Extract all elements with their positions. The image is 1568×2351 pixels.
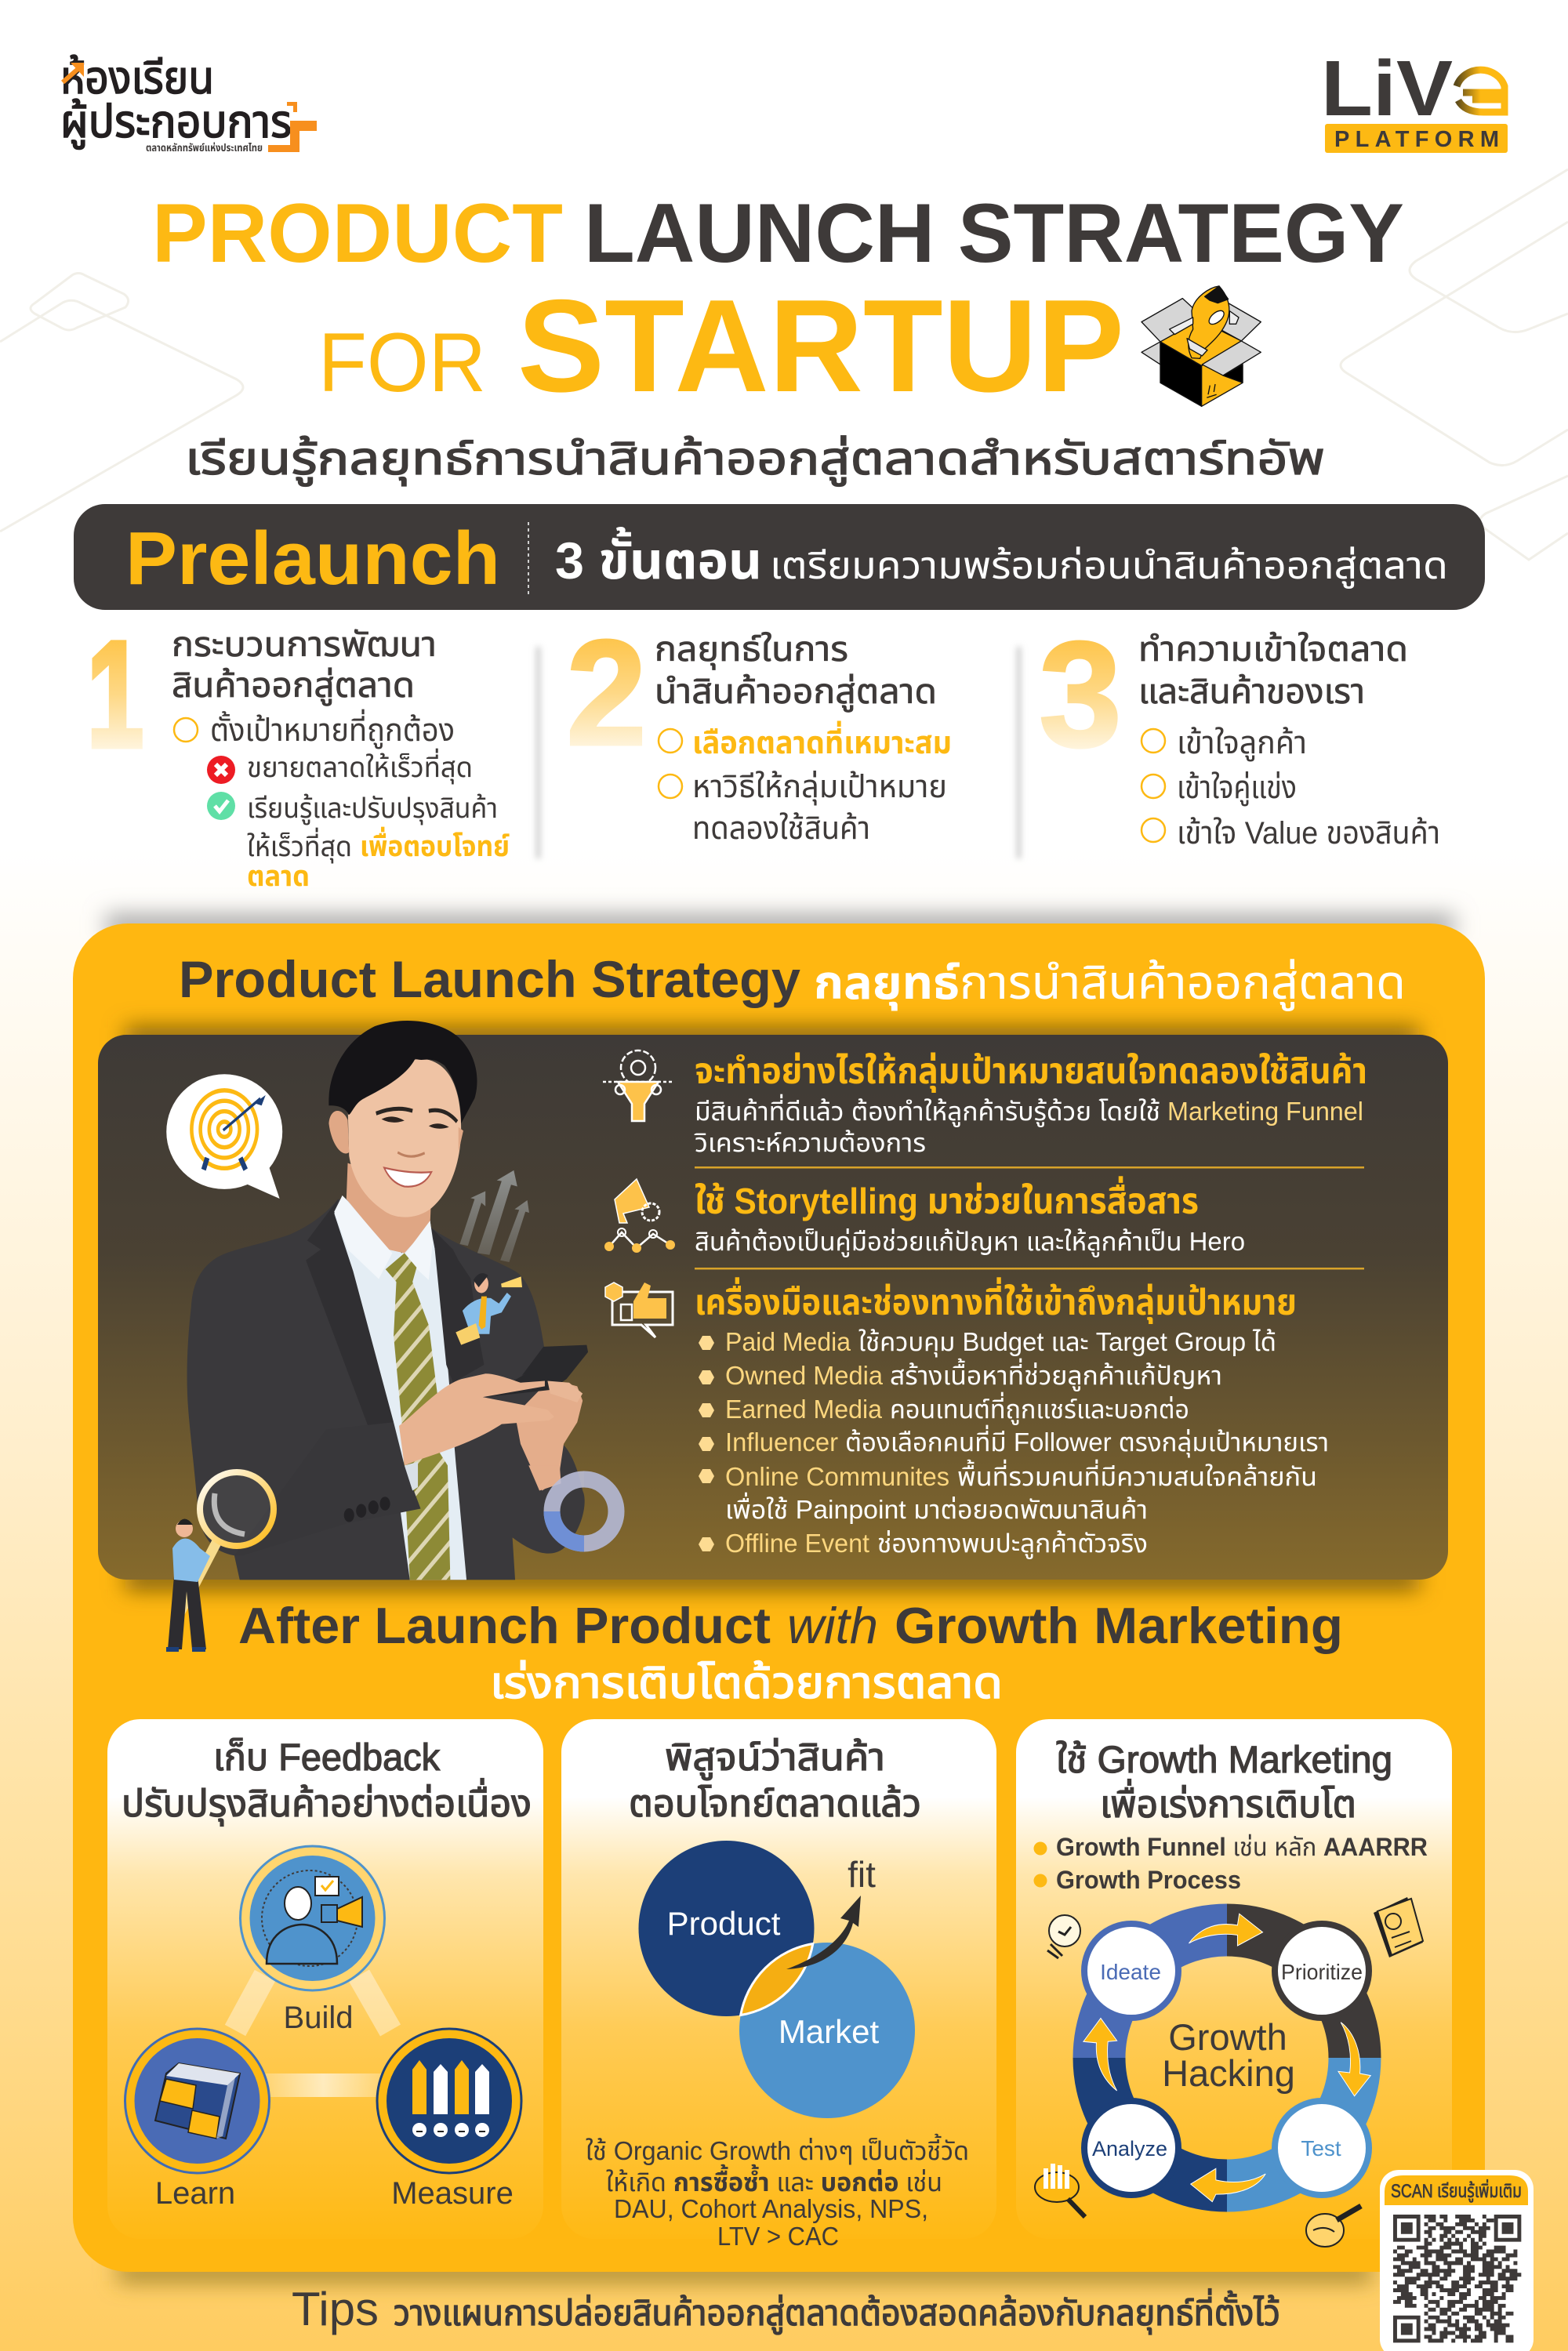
lower panel shadow (118, 2262, 1372, 2282)
phone (485, 1345, 588, 1397)
bullet list: channels: Owned Media (725, 1361, 884, 1390)
icon: measure (377, 2029, 521, 2173)
jacket (187, 1199, 585, 1580)
logo: classroom for entrepreneurs (60, 53, 317, 154)
eyes (382, 1116, 449, 1129)
title: Product Launch Strategy: PRODUCT (152, 186, 563, 280)
tips line: วางแผนการปล่อยสินค้าออกสู่ตลาดต้องสอดคล้องกับกลยุทธ์ที่ตั้งไว้ (394, 2288, 1280, 2335)
icon: documents (1374, 1897, 1423, 1957)
heading: after launch product: with (787, 1597, 878, 1654)
logo: Live Platform (1321, 45, 1508, 153)
title: For Startup: FOR (318, 315, 486, 409)
nose (397, 1152, 425, 1156)
sleeve buttons (344, 1497, 390, 1522)
bullet list: channels (699, 1327, 1329, 1559)
bullet list: channels: Online Communites (725, 1462, 949, 1491)
growth hacking cycle: Hacking (1162, 2052, 1295, 2094)
card title: ปรับปรุงสินค้าอย่างต่อเนื่อง (122, 1778, 532, 1827)
bullet list: channels: คอนเทนต์ที่ถูกแชร์และบอกต่อ (890, 1391, 1189, 1425)
banner: prelaunch: เตรียมความพร้อมก่อนนำสินค้าออกสู่ตลาด (770, 546, 1448, 589)
left hand (399, 1373, 554, 1465)
heading: product launch strategy (179, 950, 1406, 1011)
growth hacking cycle: Test (1301, 2136, 1341, 2161)
panel: step 1: ให้เร็วที่สุด (247, 827, 352, 863)
panel: step 2: 2 (566, 608, 647, 777)
icon: pen and speech (1306, 2206, 1361, 2247)
bullet list: channels: Earned Media (725, 1395, 883, 1424)
panel: step 1 (87, 610, 510, 892)
panel: step 2: นำสินค้าออกสู่ตลาด (655, 673, 937, 713)
mouth (384, 1168, 431, 1187)
panel: dark strategy panel (98, 1035, 1448, 1580)
panel: step 1: ขยายตลาดให้เร็วที่สุด (247, 748, 473, 784)
panel: step 1: ตลาด (247, 860, 310, 892)
icon: donut chart (552, 1479, 616, 1544)
growth bullets: Growth Process (1056, 1866, 1241, 1894)
heading: after launch product: เร่งการเติบโตด้วยการตลาด (490, 1658, 1003, 1707)
heading: product launch strategy: Product Launch Strategy (179, 950, 800, 1008)
hair (328, 1021, 477, 1123)
heading: after launch product: After Launch Product (238, 1597, 771, 1654)
venn diagram: fit (848, 1854, 876, 1895)
panel: step 3 (1039, 610, 1440, 851)
icon: lightbulb (1047, 1915, 1080, 1958)
card title (122, 1737, 532, 1827)
icon: thumbs up screen (605, 1283, 673, 1337)
heading group: how to attract target: มีสินค้าที่ดีแล้ว ต้องทำให้ลูกค้ารับรู้ด้วย โดยใช้ (695, 1094, 1160, 1127)
qr code card: SCAN เรียนรู้เพิ่มเติม (1391, 2179, 1522, 2203)
card title (1056, 1740, 1392, 1826)
growth arrows (459, 1170, 529, 1262)
face (348, 1059, 461, 1217)
card title: เพื่อเร่งการเติบโต (1100, 1779, 1356, 1826)
icon: jack in the box (1142, 286, 1261, 406)
bullet list: channels: พื้นที่รวมคนที่มีความสนใจคล้ายกัน (957, 1459, 1317, 1491)
heading group: how to attract target: วิเคราะห์ความต้องการ (695, 1128, 926, 1157)
heading: tools and channels: เครื่องมือและช่องทางที่ใช้เข้าถึงกลุ่มเป้าหมาย (695, 1277, 1297, 1324)
heading group: how to attract target: จะทำอย่างไรให้กลุ่มเป้าหมายสนใจทดลองใช้สินค้า (695, 1050, 1367, 1093)
panel: step 3: 3 (1039, 610, 1122, 778)
heading: product launch strategy: การนำสินค้าออกสู่ตลาด (960, 956, 1406, 1011)
collar (334, 1195, 433, 1280)
description: ใช้ Organic Growth ต่างๆ เป็นตัวชี้วัด (586, 2133, 969, 2165)
panel: feedback card (107, 1719, 543, 2239)
venn diagram (638, 1841, 915, 2118)
growth bullets (1033, 1833, 1428, 1894)
bullet list: channels: Paid Media (725, 1327, 851, 1356)
ears (328, 1111, 463, 1153)
qr code (1393, 2216, 1521, 2341)
panel: step 3: และสินค้าของเรา (1138, 673, 1365, 711)
logo: Live Platform: PLATFORM (1334, 127, 1499, 152)
panel: feedback card: Build (284, 2001, 353, 2035)
panel: step 3: เข้าใจ Value ของสินค้า (1177, 816, 1440, 851)
panel: step 1: สินค้าออกสู่ตลาด (172, 666, 415, 706)
megaphone man (456, 1273, 522, 1345)
title: Product Launch Strategy (152, 186, 1404, 280)
title: For Startup: STARTUP (517, 272, 1124, 419)
heading: after launch product (238, 1597, 1343, 1707)
panel: step 2: กลยุทธ์ในการ (655, 630, 848, 670)
description (586, 2133, 969, 2251)
description: LTV > CAC (717, 2222, 839, 2251)
card title: ตอบโจทย์ตลาดแล้ว (629, 1783, 921, 1825)
lapels (306, 1199, 484, 1429)
venn diagram: Product (667, 1905, 781, 1942)
eyebrows (376, 1108, 457, 1122)
panel: step 1: ตั้งเป้าหมายที่ถูกต้อง (210, 709, 455, 749)
panel: step 2 (566, 608, 952, 846)
fingers (547, 1380, 583, 1402)
bullet list: channels: ต้องเลือกคนที่มี Follower ตรงกลุ่มเป้าหมายเรา (845, 1424, 1329, 1458)
icon: learn (125, 2029, 270, 2173)
heading group: storytelling: สินค้าต้องเป็นคู่มือช่วยแก้ปัญหา และให้ลูกค้าเป็น Hero (695, 1227, 1245, 1257)
banner: prelaunch: 3 ขั้นตอน (555, 526, 762, 590)
bullet list: channels: Offline Event (725, 1529, 869, 1558)
icon: funnel and gears (603, 1050, 674, 1121)
qr code card (1380, 2170, 1534, 2351)
panel: product market fit card (561, 1719, 996, 2251)
logo: classroom for entrepreneurs: ตลาดหลักทรัพย์แห่งประเทศไทย (146, 142, 263, 154)
card title: เก็บ Feedback (213, 1737, 441, 1779)
left sleeve (375, 1422, 420, 1513)
panel: step 2: หาวิธีให้กลุ่มเป้าหมาย (692, 770, 947, 805)
step dividers (536, 647, 1021, 858)
banner: prelaunch: Prelaunch (125, 517, 500, 600)
card title: พิสูจน์ว่าสินค้า (665, 1737, 885, 1780)
panel: step 1: เพื่อตอบโจทย์ (360, 826, 510, 862)
bullet list: channels: ช่องทางพบปะลูกค้าตัวจริง (877, 1529, 1148, 1559)
panel: main strategy (73, 923, 1485, 2272)
icon: magnifier with charts (1035, 2164, 1085, 2217)
heading group: how to attract target (695, 1050, 1367, 1157)
panel: step 3: ทำความเข้าใจตลาด (1138, 630, 1408, 669)
subtitle: เรียนรู้กลยุทธ์การนำสินค้าออกสู่ตลาดสำหรับสตาร์ทอัพ (185, 434, 1325, 486)
icon: megaphone and nodes (604, 1179, 675, 1253)
bullet list: channels: สร้างเนื้อหาที่ช่วยลูกค้าแก้ปัญหา (890, 1358, 1222, 1391)
bullet list: channels: เพื่อใช้ Painpoint มาต่อยอดพัฒนาสินค้า (725, 1492, 1148, 1524)
panel: step 1: 1 (87, 610, 143, 778)
shirt (334, 1195, 466, 1580)
logo: Live Platform: LiV (1321, 45, 1453, 132)
icon: target speech bubble (166, 1074, 282, 1199)
panel: step 1: กระบวนการพัฒนา (172, 626, 437, 664)
banner: prelaunch (74, 504, 1485, 610)
photo: smiling businessman with phone (187, 1021, 588, 1580)
panel: step 3: เข้าใจลูกค้า (1177, 726, 1307, 761)
heading group: how to attract target: Marketing Funnel (1167, 1097, 1363, 1126)
growth hacking cycle (1083, 1914, 1370, 2202)
heading: product launch strategy: กลยุทธ์ (814, 956, 960, 1011)
right hand (515, 1379, 583, 1491)
process arrows (1083, 1914, 1370, 2202)
card title (629, 1737, 921, 1825)
growth hacking cycle: Analyze (1092, 2137, 1167, 2161)
growth hacking cycle: Ideate (1100, 1960, 1161, 1984)
shirt cuff (405, 1462, 418, 1491)
growth bullets: Growth Funnel เช่น หลัก AAARRR (1056, 1833, 1428, 1861)
panel: step 2: ทดลองใช้สินค้า (692, 811, 870, 846)
heading: after launch product: Growth Marketing (895, 1597, 1343, 1654)
heading group: storytelling (695, 1176, 1245, 1257)
logo: classroom for entrepreneurs: ห้องเรียน (60, 53, 214, 103)
bullet list: channels: Influencer (725, 1428, 838, 1457)
main panel shadow (106, 914, 1454, 938)
card title: ใช้ Growth Marketing (1056, 1740, 1392, 1781)
panel: growth marketing card (1016, 1719, 1452, 2247)
panel: feedback card: Learn (155, 2176, 235, 2211)
title: Product Launch Strategy: LAUNCH STRATEGY (584, 186, 1404, 280)
logo: classroom for entrepreneurs: ผู้ประกอบการ (60, 96, 292, 149)
panel: step 3: เข้าใจคู่แข่ง (1177, 771, 1297, 806)
tips line (292, 2283, 1280, 2335)
description: DAU, Cohort Analysis, NPS, (614, 2194, 928, 2223)
heading group: storytelling: ใช้ Storytelling มาช่วยในการสื่อสาร (695, 1176, 1199, 1221)
growth hacking cycle: Growth (1168, 2016, 1287, 2058)
tips line: Tips (292, 2283, 379, 2335)
dark panel shadows (125, 1027, 1419, 1590)
icon: build (240, 1846, 384, 1990)
venn diagram: Market (779, 2013, 880, 2050)
right cuff (528, 1465, 561, 1491)
neck (347, 1163, 431, 1253)
panel: feedback card: Measure (391, 2176, 514, 2211)
panel: step 2: เลือกตลาดที่เหมาะสม (692, 720, 952, 760)
icon: magnifier and person (166, 1472, 274, 1649)
tie (386, 1253, 450, 1580)
description: ให้เกิด การซื้อซ้ำ และ บอกต่อ เช่น (606, 2164, 942, 2197)
build measure learn triangle (235, 1975, 390, 2097)
growth hacking cycle: Prioritize (1281, 1960, 1363, 1984)
bullet list: channels: ใช้ควบคุม Budget และ Target Group ได้ (858, 1327, 1276, 1358)
background diamond pattern (0, 169, 1568, 560)
panel: step 1: เรียนรู้และปรับปรุงสินค้า (247, 792, 498, 825)
